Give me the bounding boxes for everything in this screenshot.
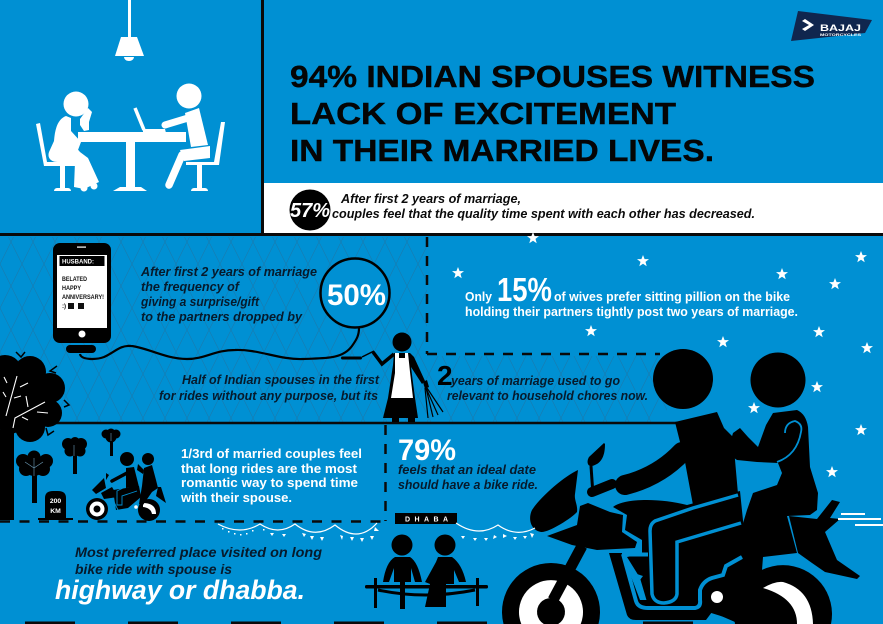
man figure	[165, 84, 210, 185]
logo: Bajaj Motorcycles	[791, 11, 872, 41]
icon: large tree	[0, 352, 69, 520]
icon: 200 km milestone: 200	[50, 498, 61, 505]
pillion head	[750, 352, 806, 408]
stars	[452, 232, 873, 477]
text: long rides stat	[180, 446, 362, 505]
text: most preferred place: bike ride with spouse is	[75, 562, 233, 577]
icon: 200 km milestone	[38, 491, 73, 520]
title: IN THEIR MARRIED LIVES.	[290, 133, 714, 168]
badge: 50%: 50%	[327, 279, 386, 312]
title: 94% INDIAN SPOUSES WITNESS	[290, 59, 815, 94]
front wheel	[502, 546, 600, 624]
icon: hanging lamp	[115, 0, 144, 61]
rider torso and arm	[625, 412, 738, 505]
icon: small trees	[16, 428, 120, 503]
text: quality time	[332, 192, 755, 221]
icon: large couple on motorcycle	[502, 349, 883, 624]
sign: dhaba: DHABA	[405, 516, 448, 524]
text: most preferred place: Most preferred place visited on long	[75, 545, 323, 560]
text: long rides stat: with their spouse.	[180, 490, 292, 505]
icon: smartphone with message: HUSBAND:	[62, 258, 94, 266]
text: household chores: relevant to household chores now.	[447, 389, 648, 403]
text: 79% ideal date: 79%	[398, 434, 456, 467]
panel dividers dashed	[0, 237, 735, 623]
badge: 50%	[320, 258, 390, 328]
text: 15% pillion stat: of wives prefer sitting pillion on the bike	[554, 289, 790, 304]
text: 15% pillion stat: 15%	[497, 271, 552, 308]
bunting flags	[218, 523, 535, 542]
icon: smartphone with message: ANNIVERSARY!	[62, 294, 104, 301]
icon: couple at table	[36, 84, 225, 192]
text: 15% pillion stat: Only	[465, 289, 493, 304]
title: LACK OF EXCITEMENT	[290, 96, 676, 131]
text: long rides stat: 1/3rd of married couples feel	[181, 446, 362, 461]
pillion body	[727, 410, 818, 624]
icon: smartphone with message: :)	[62, 303, 66, 310]
rider leg outline	[650, 495, 741, 603]
text: most preferred place	[55, 545, 323, 605]
laptop	[135, 108, 166, 133]
rear wheel	[734, 565, 832, 624]
text: household chores: years of marriage used to go	[450, 374, 620, 388]
text: long rides stat: romantic way to spend time	[181, 475, 358, 490]
lower frame	[609, 553, 735, 622]
icon: couple on charpoy	[365, 534, 488, 609]
text: quality time: After first 2 years of marriage,	[340, 192, 521, 206]
title	[290, 59, 815, 168]
right chair	[186, 122, 225, 191]
text: surprise gift frequency: giving a surprise/gift	[140, 295, 260, 309]
icon: small motorcycle	[86, 452, 166, 521]
pillion arm outline	[777, 421, 801, 462]
icon: maid with pan and broom	[341, 332, 443, 422]
fairing	[547, 503, 637, 550]
icon: smartphone with message	[53, 243, 111, 353]
text: surprise gift frequency: After first 2 years of marriage	[140, 265, 317, 279]
icon: 200 km milestone: KM	[50, 508, 61, 515]
text: 79% ideal date: should have a bike ride.	[398, 478, 538, 492]
text: surprise gift frequency	[140, 265, 317, 324]
icon: smartphone with message: HAPPY	[62, 285, 82, 292]
text: surprise gift frequency: the frequency of	[141, 280, 241, 294]
text: 79% ideal date: feels that an ideal date	[398, 463, 536, 477]
foot peg	[703, 581, 737, 621]
table	[78, 132, 186, 191]
panel: 57% callout strip	[264, 183, 883, 233]
tank and seat block	[613, 491, 745, 612]
logo: Bajaj Motorcycles: BAJAJ	[820, 23, 861, 34]
text: 15% pillion stat	[465, 271, 798, 319]
sign: dhaba	[395, 513, 457, 524]
rear mudguard and tail	[789, 500, 860, 579]
text: household chores	[437, 360, 648, 403]
badge: 57%	[290, 190, 330, 230]
speed lines	[838, 514, 883, 525]
text: rides without purpose: Half of Indian spouses in the first	[182, 373, 380, 387]
text: surprise gift frequency: to the partners dropped by	[141, 310, 303, 324]
text: 15% pillion stat: holding their partners tightly post two years of marriage.	[465, 304, 798, 319]
icon: smartphone with message: BELATED	[62, 276, 87, 283]
panel: header dividers	[0, 0, 883, 236]
text: most preferred place: highway or dhabba.	[55, 575, 305, 605]
rider head	[653, 349, 713, 409]
text: rides without purpose: for rides without any purpose, but its	[159, 389, 378, 403]
text: rides without purpose	[159, 373, 380, 403]
text: quality time: couples feel that the quality time spent with each other has decreased.	[332, 207, 755, 221]
logo: Bajaj Motorcycles: MOTORCYCLES	[820, 33, 862, 37]
frame gap	[622, 554, 742, 608]
left chair	[36, 123, 76, 191]
windshield and mirror	[530, 443, 612, 532]
text: long rides stat: that long rides are the most	[181, 461, 358, 476]
text: 79% ideal date	[398, 434, 538, 492]
badge: 57%: 57%	[290, 200, 330, 222]
woman figure	[48, 92, 99, 192]
cable from phone to 50% bubble	[80, 328, 359, 359]
text: household chores: 2	[437, 360, 453, 391]
